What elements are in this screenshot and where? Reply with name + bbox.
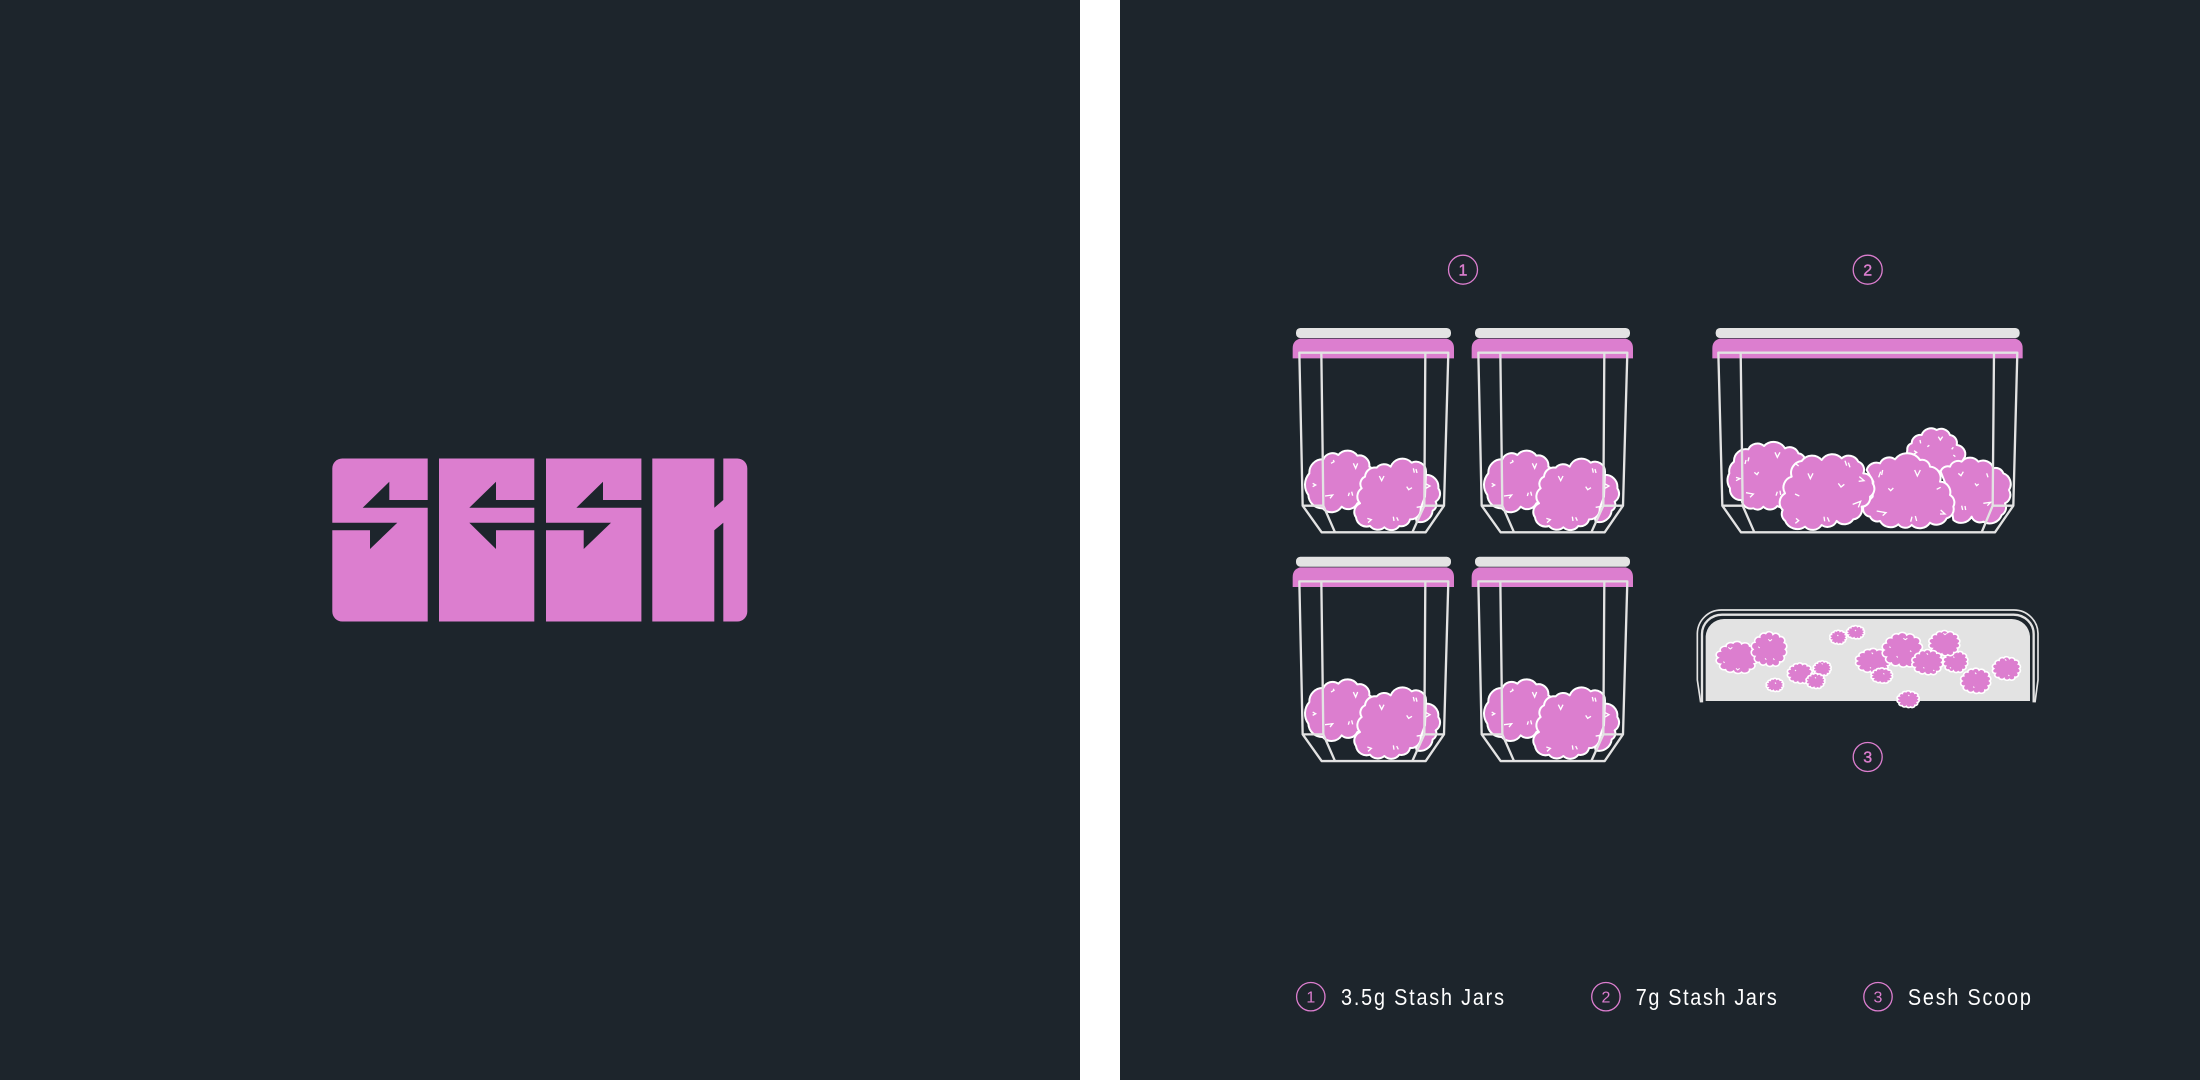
jar bottom left [1293,557,1454,761]
legend item 2: 7g Stash Jars [1636,985,1777,1010]
panel: products [1120,0,2200,1080]
legend item 2: 2 [1601,989,1610,1006]
legend item 1: 3.5g Stash Jars [1341,985,1504,1010]
3.5g jars group [1293,328,1633,761]
legend [1297,982,2031,1011]
scoop buds [1716,626,2020,708]
letter S [332,458,428,622]
legend item 2 [1592,982,1777,1011]
letter H [652,458,747,622]
scoop bud highlights [1723,630,2009,696]
legend item 3 [1864,982,2031,1011]
7g jar [1712,328,2023,532]
letter E [439,458,535,622]
Sesh scoop [1697,610,2038,708]
marker 3 [1853,742,1882,772]
marker 1 [1448,255,1478,284]
jar bottom right [1472,557,1633,761]
letter S second [545,458,642,622]
marker 2 [1853,255,1882,284]
jar top right [1472,328,1633,532]
legend item 3: 3 [1874,989,1883,1006]
legend item 1: 1 [1306,989,1315,1006]
marker 3: 3 [1863,750,1872,767]
marker 2: 2 [1863,262,1872,279]
logo: SESH wordmark [332,458,747,622]
jar top left [1293,328,1454,532]
legend item 3: Sesh Scoop [1908,985,2031,1010]
divider: white band [1080,0,1120,1080]
panel: logo background [0,0,1080,1080]
marker 1: 1 [1459,262,1468,279]
